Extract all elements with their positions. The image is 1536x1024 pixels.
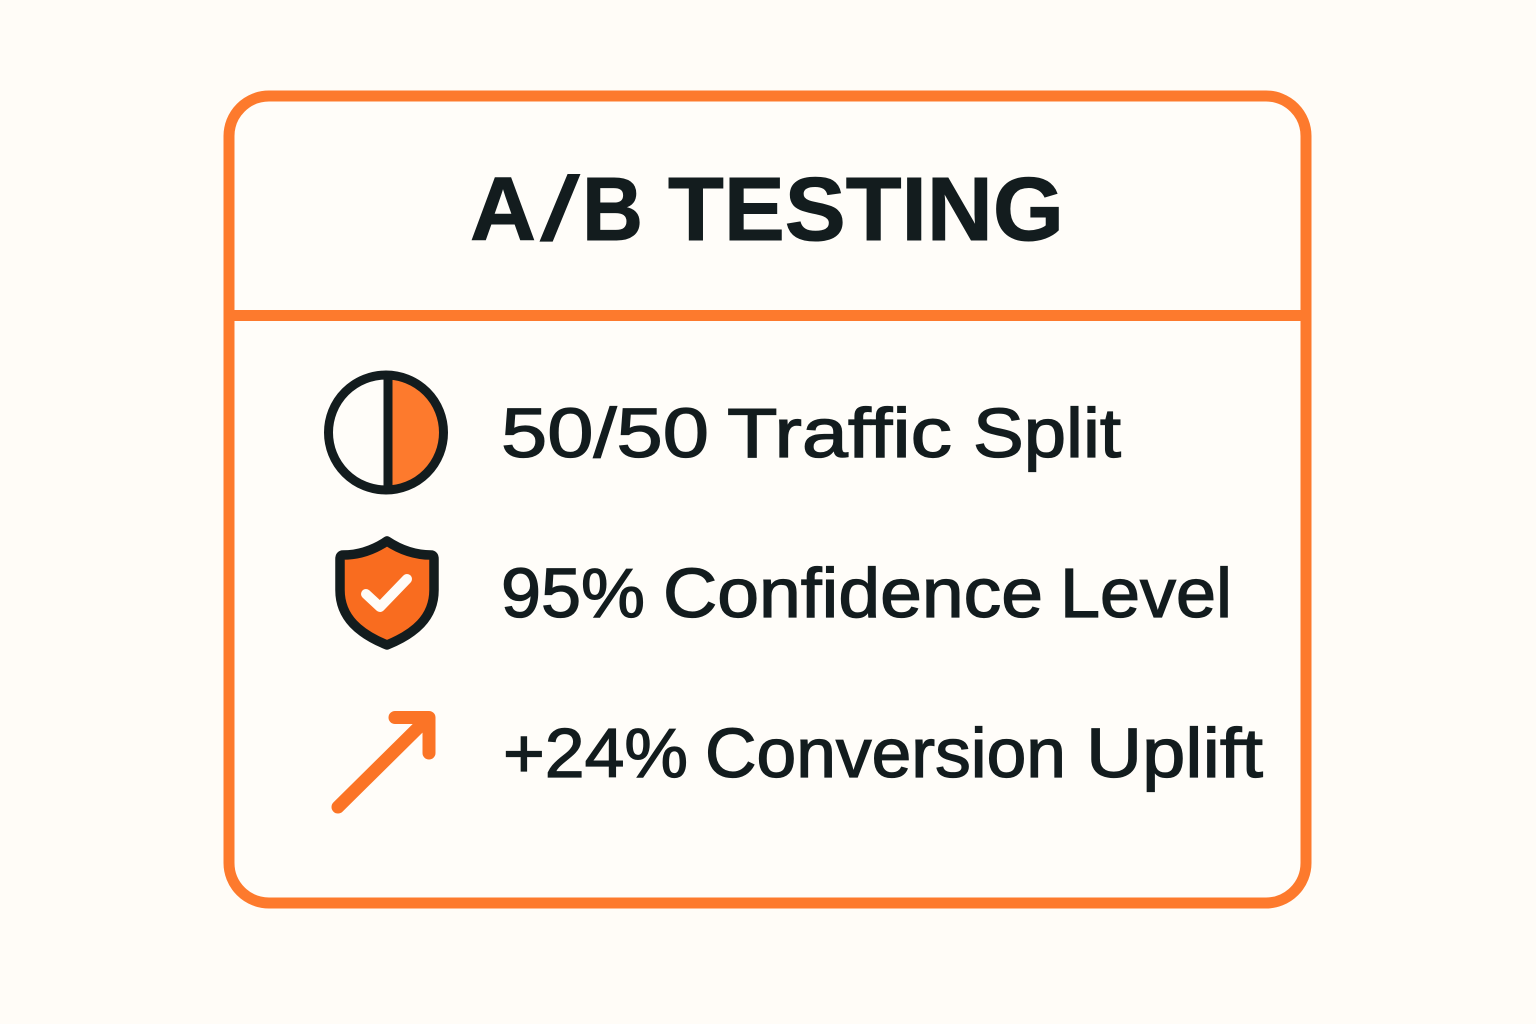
text: conversion uplift: +24% bbox=[503, 714, 688, 792]
row: confidence level bbox=[340, 541, 1232, 645]
text: 50/50 traffic split: Split bbox=[973, 394, 1121, 472]
text: 95% confidence level: Level bbox=[1060, 554, 1232, 632]
text: conversion uplift: Uplift bbox=[1086, 714, 1263, 792]
text: 95% confidence level: 95% bbox=[501, 554, 645, 632]
text: 50/50 traffic split: 50/50 bbox=[501, 394, 709, 472]
row: conversion uplift bbox=[338, 714, 1263, 807]
title bbox=[470, 160, 1064, 260]
title: TESTING bbox=[668, 160, 1064, 260]
text: 50/50 traffic split bbox=[501, 394, 1121, 472]
text: 95% confidence level: Confidence bbox=[663, 554, 1043, 632]
title: A bbox=[470, 160, 536, 260]
title: B bbox=[582, 160, 643, 260]
text: 95% confidence level bbox=[501, 554, 1232, 632]
panel: card frame bbox=[229, 96, 1306, 903]
icon: split circle bbox=[328, 374, 444, 491]
row: traffic split bbox=[328, 374, 1121, 491]
icon: shield with check bbox=[340, 541, 434, 645]
text: conversion uplift bbox=[503, 714, 1263, 792]
text: 50/50 traffic split: Traffic bbox=[727, 394, 952, 472]
text: conversion uplift: Conversion bbox=[705, 714, 1066, 792]
title: / bbox=[541, 160, 579, 260]
icon: up-right arrow bbox=[338, 718, 429, 807]
header divider bbox=[229, 310, 1306, 321]
